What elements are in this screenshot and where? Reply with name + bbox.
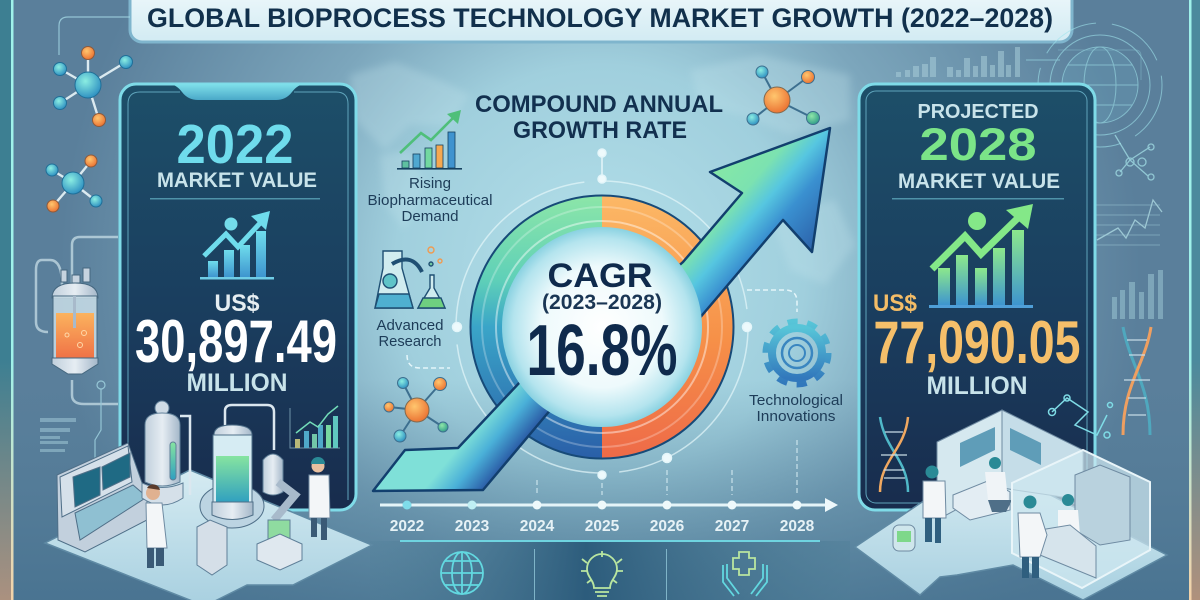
decorative globe wireframe [1026,23,1162,147]
left tank [142,401,183,505]
faint bar chart background [896,47,1020,77]
front researcher [1018,496,1047,578]
label: Technological [749,393,843,409]
divider [150,198,320,200]
decorative list bars left [40,418,76,452]
year labels: 2024 [520,518,555,535]
currency: US$ [873,290,918,317]
small chart [290,406,340,448]
decorative bars right [1112,270,1163,319]
label: Rising [409,176,451,192]
year labels: 2025 [585,518,620,535]
cart [197,520,227,575]
currency: US$ [214,290,260,317]
driver: rising biopharmaceutical demand [368,110,492,225]
value 30,897.49: 30,897.49 [135,308,337,375]
panel tab [168,84,306,100]
CAGR value: 16.8% [526,311,678,391]
donut ring [471,196,733,458]
standing researcher [923,466,946,543]
driver: rising biopharmaceutical demand: Demand [402,209,458,225]
pipes [180,405,274,495]
arrow upper segment and head [640,128,830,345]
heading: compound annual growth rate [475,91,723,144]
period: (2023–2028) [542,291,662,314]
icon: DNA in panel [880,417,908,492]
decorative molecule network [1048,395,1112,438]
bottom icon bar [370,540,850,600]
isometric scene: left bioprocess plant [45,401,372,600]
arrow lower segment [373,382,570,491]
person right [309,457,330,540]
year: 2028 [920,119,1036,170]
heading: compound annual growth rate: GROWTH RATE [513,117,687,144]
million label: MILLION [926,372,1028,400]
molecule lower centre left [384,378,448,442]
year labels: 2022 [390,518,424,535]
driver: technological innovations: Innovations [756,409,836,425]
year labels [390,518,815,535]
icon: growth chart [200,211,274,280]
icon: hands with cross [723,552,767,596]
decorative line chart right [1095,200,1162,245]
market value label: MARKET VALUE [157,169,317,192]
icon: growth chart [929,204,1033,308]
decorative molecule right [1115,135,1154,180]
growth arrow [373,128,830,491]
divider [892,198,1064,200]
title banner [130,0,1072,42]
panel: 2022 market value [120,84,356,510]
server racks [1075,465,1130,545]
driver: technological innovations [749,322,843,425]
molecule mid left [46,155,102,212]
market value label: MARKET VALUE [898,170,1060,193]
glass bioreactor [200,425,264,528]
desk [953,480,1010,520]
faint world map [350,55,855,285]
projected label: PROJECTED [918,101,1038,123]
year labels: 2028 [780,518,815,535]
platform [45,470,372,600]
small tank [263,454,283,495]
back walls [937,410,1002,520]
thin guide arcs around ring [407,149,797,479]
icon: rising chart [397,110,462,170]
CAGR label: CAGR [548,257,652,295]
icon: globe [441,552,483,594]
person left [146,484,167,568]
wall screens [960,427,995,467]
icon: gear [766,322,828,384]
second researcher behind desk [1058,494,1080,535]
sample vial [893,525,915,551]
icon: lab flasks [375,247,445,308]
timeline [380,440,838,535]
control console [57,443,147,552]
year: 2022 [176,113,294,175]
year labels: 2027 [715,518,749,535]
title banner: GLOBAL BIOPROCESS TECHNOLOGY MARKET GROWTH (2022–2028) [147,3,1053,33]
inner desk [1040,525,1096,578]
circuit lines left [36,17,130,470]
label: Advanced [376,318,444,334]
platform [855,470,1167,600]
panel inner outline [866,91,1087,503]
million label: MILLION [186,369,288,397]
robot arm and green device [257,482,302,570]
heading: compound annual growth rate: COMPOUND ANNUAL [475,91,723,118]
driver: advanced research: Research [378,334,442,350]
isometric scene: right laboratory [855,410,1167,600]
glass room [1012,450,1150,588]
driver: rising biopharmaceutical demand: Biopharmaceutical [368,193,492,209]
year labels: 2026 [650,518,685,535]
molecule top centre [747,66,820,125]
centre disc [502,227,702,427]
seated researcher [985,457,1012,512]
panel inner outline [128,92,348,500]
icon: DNA helix right [1123,327,1151,435]
driver: advanced research [375,247,445,350]
panel: 2028 market value [859,84,1095,510]
icon: light bulb [581,551,623,596]
year labels: 2023 [455,518,490,535]
molecule top left [54,46,132,126]
value 77,090.05: 77,090.05 [874,309,1080,376]
left bioreactor [52,268,98,374]
